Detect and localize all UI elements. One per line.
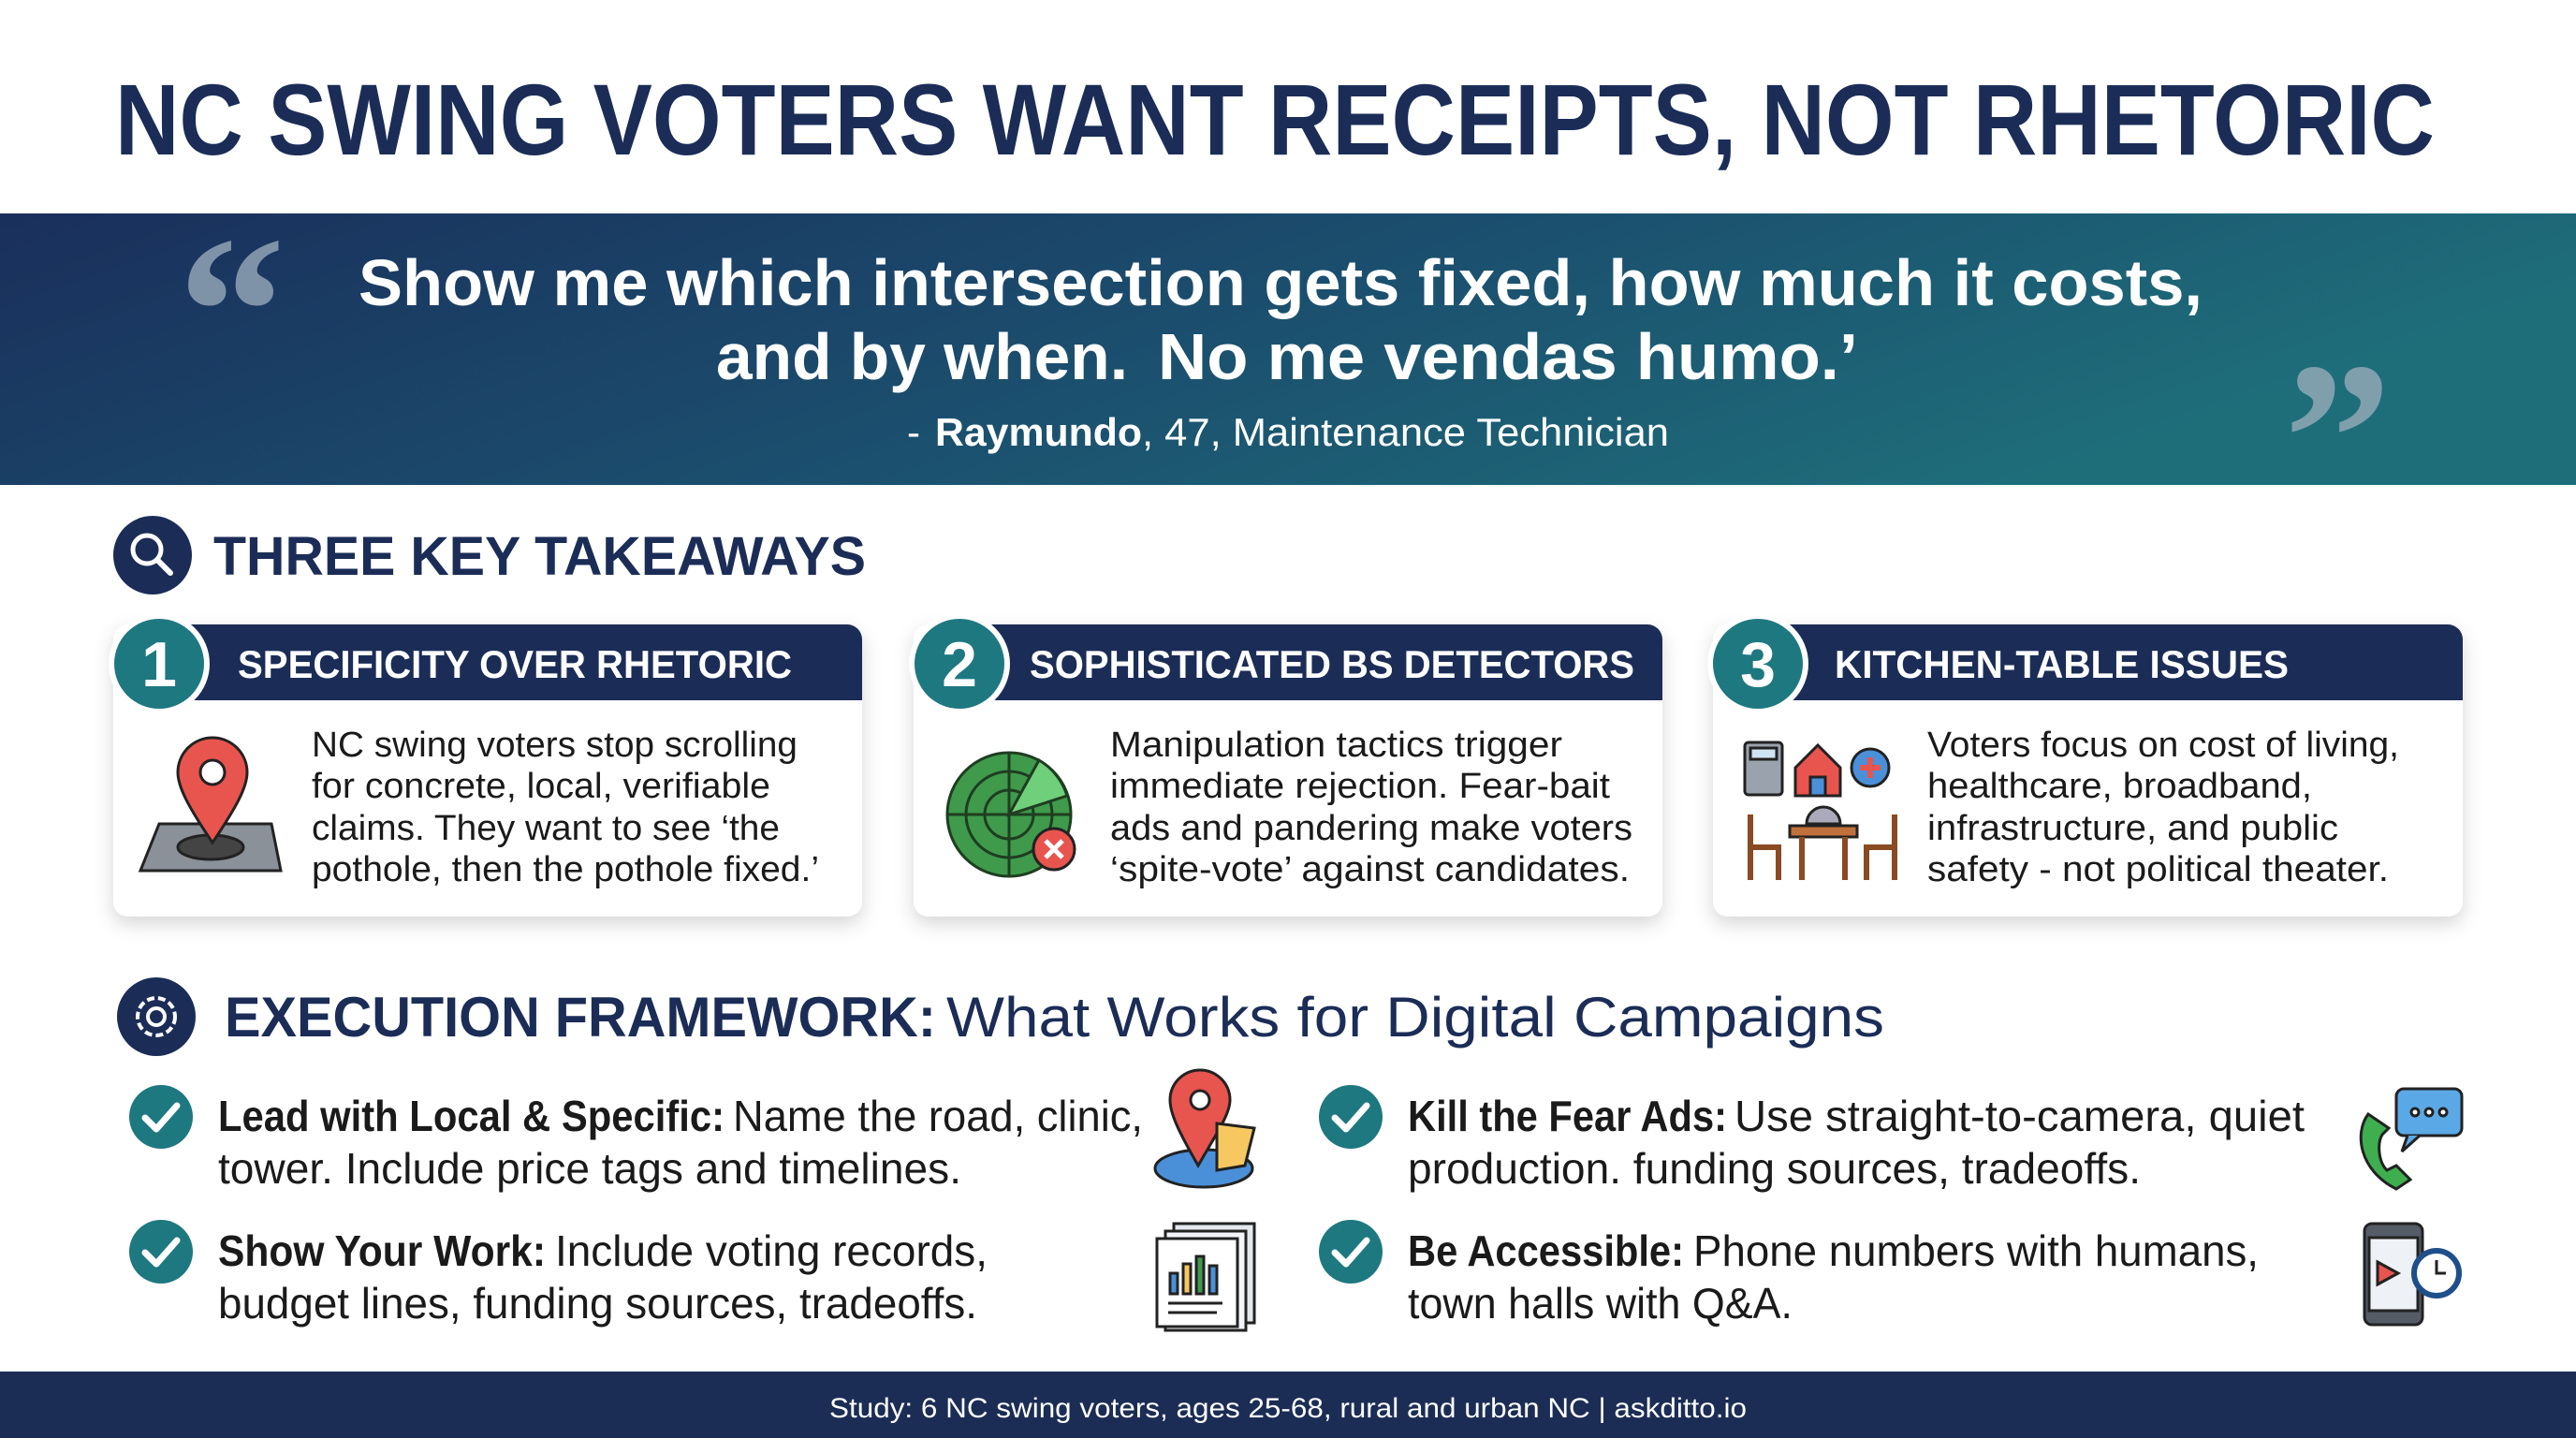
item: be accessible: Be Accessible: [1408, 1226, 1684, 1275]
icon: map pin pothole [140, 738, 281, 871]
quote text: and by when. [716, 320, 1128, 393]
item: kill the fear ads [1319, 1085, 2462, 1193]
panel: card 1: claims. They want to see ‘the [312, 809, 780, 848]
icon: phone with clock [2364, 1224, 2459, 1325]
attribution: Raymundo [935, 410, 1142, 454]
icon: phone and chat [2361, 1089, 2462, 1189]
attribution: - [907, 410, 920, 454]
panel: card 1: pothole, then the pothole fixed.’ [312, 850, 819, 889]
item: kill the fear ads: Use straight-to-camera, quiet [1734, 1092, 2305, 1140]
icon: open quote: “ [178, 192, 285, 431]
icon: radar [947, 753, 1075, 876]
item: show your work: budget lines, funding sources, tradeoffs. [218, 1279, 977, 1328]
item: show your work [129, 1220, 1254, 1330]
section heading: execution framework: EXECUTION FRAMEWORK: [225, 986, 936, 1049]
panel: card 1: NC swing voters stop scrolling [312, 726, 798, 765]
quote band [0, 192, 2576, 557]
item: lead with local: Name the road, clinic, [733, 1092, 1143, 1140]
quote text: Show me which intersection gets fixed, how much it costs, [359, 246, 2203, 319]
panel: card 2: ‘spite-vote’ against candidates. [1110, 850, 1630, 889]
section heading: takeaways [113, 516, 866, 594]
footer [0, 1372, 2576, 1438]
panel: card 3: Voters focus on cost of living, [1927, 726, 2399, 765]
panel: card 3: 3 [1740, 629, 1776, 700]
item: lead with local [129, 1070, 1254, 1193]
panel: card 3: infrastructure, and public [1927, 809, 2338, 848]
icon: close quote: ” [2284, 318, 2392, 557]
item: be accessible: Phone numbers with humans, [1693, 1226, 2259, 1275]
panel: card 1: for concrete, local, verifiable [312, 767, 770, 806]
section heading: execution framework [117, 977, 1884, 1056]
panel: card 3: healthcare, broadband, [1927, 767, 2312, 806]
quote text [359, 246, 2203, 393]
panel: card 2: Manipulation tactics trigger [1110, 726, 1562, 765]
icon: documents chart [1157, 1224, 1254, 1330]
icon: pin and tag [1155, 1070, 1254, 1187]
item: show your work: Include voting records, [555, 1226, 988, 1275]
item: show your work: Show Your Work: [218, 1226, 546, 1275]
footer: Study: 6 NC swing voters, ages 25-68, rural and urban NC | askditto.io [829, 1393, 1747, 1424]
attribution: , 47, Maintenance Technician [1142, 410, 1669, 454]
section heading: takeaways: THREE KEY TAKEAWAYS [213, 526, 866, 587]
item: lead with local: Lead with Local & Specific: [218, 1092, 724, 1140]
panel: card 2: 2 [942, 629, 977, 700]
panel: card 1: 1 [141, 629, 177, 700]
panel: card 2 [909, 613, 1662, 917]
item: kill the fear ads: Kill the Fear Ads: [1408, 1092, 1727, 1140]
panel: card 1: SPECIFICITY OVER RHETORIC [238, 642, 792, 686]
panel: card 2: SOPHISTICATED BS DETECTORS [1030, 642, 1634, 686]
section heading: execution framework: What Works for Digital Campaigns [946, 986, 1884, 1049]
panel: card 2: immediate rejection. Fear-bait [1110, 767, 1610, 806]
panel: card 3: safety - not political theater. [1927, 850, 2389, 889]
panel: card 1 [109, 613, 862, 917]
icon: kitchen table [1745, 742, 1895, 880]
quote text: No me vendas humo.’ [1158, 320, 1858, 393]
panel: card 3 [1707, 613, 2463, 917]
item: be accessible [1319, 1220, 2459, 1328]
item: lead with local: tower. Include price tags and timelines. [218, 1144, 961, 1193]
attribution [907, 410, 1669, 454]
panel: card 3: KITCHEN-TABLE ISSUES [1835, 642, 2289, 686]
item: be accessible: town halls with Q&A. [1408, 1279, 1793, 1328]
item: kill the fear ads: production. funding sources, tradeoffs. [1408, 1144, 2141, 1193]
panel: card 2: ads and pandering make voters [1110, 809, 1632, 848]
